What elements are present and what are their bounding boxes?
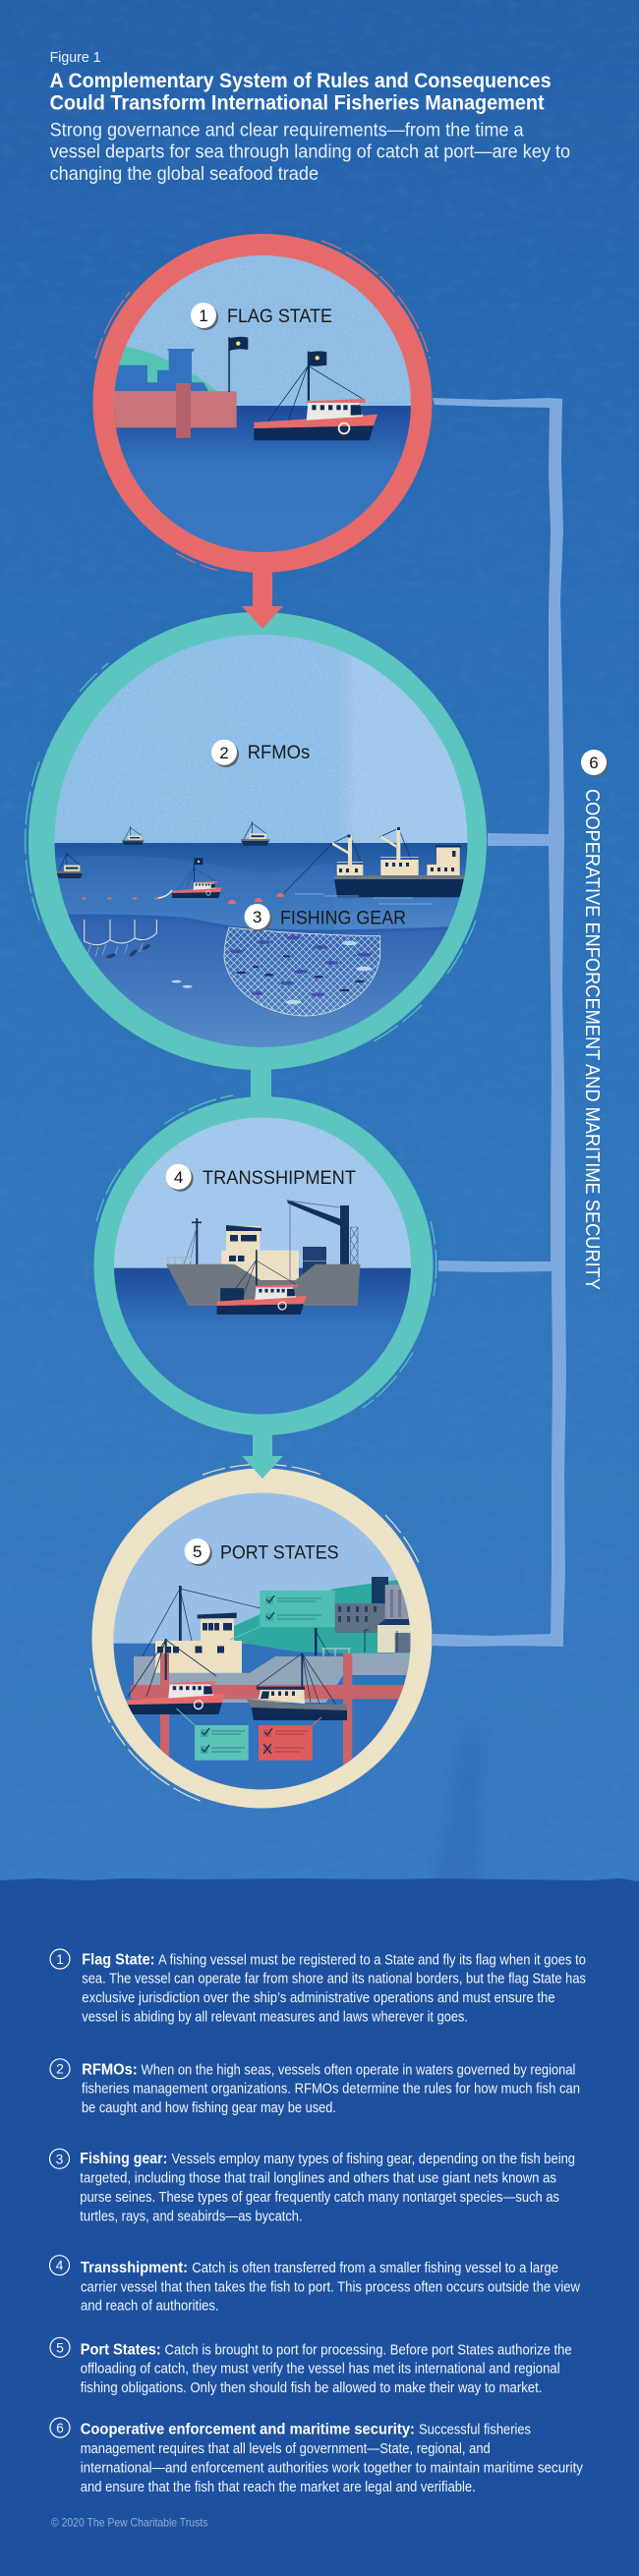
item 1: flag state: Flag State:	[82, 1951, 155, 1968]
label: fishing gear: 3	[253, 908, 261, 926]
item 6: cooperative enforcement: Cooperative enforcement and maritime security:	[81, 2421, 415, 2437]
icon: red checklist	[259, 1717, 321, 1761]
icon: teal checklist, upper	[230, 1591, 335, 1640]
label: RFMOs: 2	[219, 744, 229, 762]
panel: port states circle	[90, 1464, 433, 1808]
label: RFMOs: RFMOs	[248, 743, 310, 763]
item 1: flag state: vessel is abiding by all relevant measures and laws wherever it goes.	[82, 2010, 468, 2026]
item 1: flag state: A fishing vessel must be registered to a State and fly its flag when it goes to	[158, 1952, 586, 1968]
icon: pier	[131, 1653, 405, 1767]
item 6: cooperative enforcement: Successful fisheries	[419, 2422, 531, 2437]
item 2: RFMOs: be caught and how fishing gear may be used.	[82, 2100, 336, 2116]
title: Could Transform International Fisheries Management	[50, 90, 545, 114]
item 4: transshipment: Transshipment:	[81, 2260, 188, 2276]
item 5: port states: Catch is brought to port for processing. Before port States authorize the	[165, 2342, 572, 2358]
item 5: port states: Port States:	[81, 2341, 161, 2358]
vertical label: cooperative enforcement and maritime security	[581, 750, 609, 1290]
item 3: fishing gear: purse seines. These types of gear frequently catch many nontarget species—such as	[80, 2190, 559, 2206]
label: RFMOs	[211, 740, 310, 767]
label: flag state: FLAG STATE	[227, 307, 332, 327]
icon: carrier vessel at dock	[134, 1586, 413, 1703]
icon: harbour buildings	[232, 1577, 413, 1653]
icon: bycatch animals	[106, 944, 150, 959]
label: port states: 5	[193, 1542, 202, 1561]
item 4: transshipment: and reach of authorities.	[81, 2299, 219, 2315]
subtitle	[50, 119, 570, 185]
item 3: fishing gear: Fishing gear:	[80, 2151, 167, 2167]
item 3: fishing gear: 3	[56, 2151, 64, 2166]
item 4: transshipment: 4	[56, 2258, 64, 2273]
arrow: transshipment to port states	[242, 1425, 283, 1479]
subtitle: vessel departs for sea through landing of catch at port—are key to	[50, 141, 570, 163]
label: transshipment: TRANSSHIPMENT	[203, 1168, 356, 1189]
item 2: RFMOs	[50, 2059, 580, 2116]
title	[50, 69, 552, 114]
label: transshipment	[166, 1164, 356, 1192]
item 1: flag state: exclusive jurisdiction over the ship’s administrative operations and must ensure the	[82, 1990, 555, 2006]
item 6: cooperative enforcement	[50, 2418, 584, 2495]
panel: transshipment circle	[94, 1095, 436, 1435]
vertical label: cooperative enforcement and maritime security: 6	[589, 754, 599, 772]
item 1: flag state	[50, 1949, 586, 2026]
item 1: flag state: sea. The vessel can operate far from shore and its national borders, but the flag State has	[82, 1972, 586, 1988]
item 1: flag state: 1	[56, 1951, 64, 1967]
item 5: port states: offloading of catch, they must verify the vessel has met its international and regional	[81, 2362, 560, 2378]
subtitle: Strong governance and clear requirements—from the time a	[50, 119, 524, 140]
icon: longline boat	[172, 858, 222, 898]
item 3: fishing gear	[49, 2149, 575, 2224]
icon: flagged fishing boat	[254, 351, 378, 440]
subtitle: changing the global seafood trade	[50, 163, 319, 185]
panel: descriptions	[0, 1878, 639, 2576]
item 3: fishing gear: targeted, including those that trail longlines and others that use giant nets known as	[80, 2171, 556, 2187]
label: fishing gear: FISHING GEAR	[280, 909, 406, 929]
item 6: cooperative enforcement: international—and enforcement authorities work together to maintain maritime security	[81, 2461, 584, 2477]
icon: floats and buoys	[83, 893, 284, 904]
item 4: transshipment	[49, 2256, 580, 2315]
label: flag state	[191, 303, 332, 330]
panel: flag state circle	[92, 234, 433, 573]
item 4: transshipment: Catch is often transferred from a smaller fishing vessel to a large	[192, 2261, 558, 2276]
item 2: RFMOs: fisheries management organizations. RFMOs determine the rules for how much fish can	[82, 2082, 580, 2098]
item 6: cooperative enforcement: management requires that all levels of government—State, regional, and	[81, 2441, 491, 2457]
label: port states	[185, 1539, 338, 1566]
label: transshipment: 4	[174, 1168, 183, 1187]
icon: shore flag	[228, 337, 248, 392]
icon: teal checklist, lower	[177, 1708, 249, 1761]
item 2: RFMOs: RFMOs:	[82, 2061, 138, 2078]
icon: longline gear	[85, 890, 172, 957]
item 4: transshipment: carrier vessel that then takes the fish to port. This process often occurs outside the view	[81, 2279, 580, 2295]
icon: navy and cream boat	[247, 1653, 347, 1720]
icon: red fishing boat	[126, 1639, 225, 1714]
connector: cooperative enforcement frame	[433, 398, 566, 1647]
icon: purse seine net with fish	[171, 927, 380, 1016]
background: blue textured ocean	[0, 0, 639, 1886]
icon: harbour town	[108, 346, 237, 438]
item 5: port states	[50, 2337, 572, 2396]
label: flag state: 1	[199, 307, 208, 325]
copyright: © 2020 The Pew Charitable Trusts	[51, 2516, 207, 2530]
item 3: fishing gear: Vessels employ many types of fishing gear, depending on the fish being	[171, 2152, 575, 2167]
label: fishing gear	[245, 904, 406, 931]
item 2: RFMOs: 2	[56, 2061, 64, 2077]
title: A Complementary System of Rules and Consequences	[50, 69, 552, 92]
arrow: flag state to RFMOs	[242, 565, 283, 629]
icon: purse seiner ship	[283, 827, 466, 904]
icon: carrier ship	[166, 1200, 360, 1306]
item 2: RFMOs: When on the high seas, vessels often operate in waters governed by regional	[142, 2062, 575, 2078]
icon: fishing boat alongside	[216, 1250, 307, 1315]
item 5: port states: fishing obligations. Only then should fish be allowed to make their way to market.	[81, 2380, 542, 2396]
label: port states: PORT STATES	[220, 1543, 338, 1564]
item 6: cooperative enforcement: 6	[56, 2420, 64, 2436]
item 5: port states: 5	[56, 2339, 64, 2355]
stem: RFMOs to transshipment	[251, 1061, 271, 1105]
panel: RFMOs and fishing gear circle	[26, 612, 487, 1070]
icon: distant fishing boats	[56, 821, 269, 878]
header text block	[50, 50, 570, 185]
vertical label: cooperative enforcement and maritime security: COOPERATIVE ENFORCEMENT AND MARITIME SECURITY	[581, 789, 604, 1290]
item 6: cooperative enforcement: and ensure that the fish that reach the market are legal and verifiable.	[81, 2480, 476, 2495]
item 3: fishing gear: turtles, rays, and seabirds—as bycatch.	[80, 2209, 303, 2224]
figure label: Figure 1	[50, 50, 101, 66]
